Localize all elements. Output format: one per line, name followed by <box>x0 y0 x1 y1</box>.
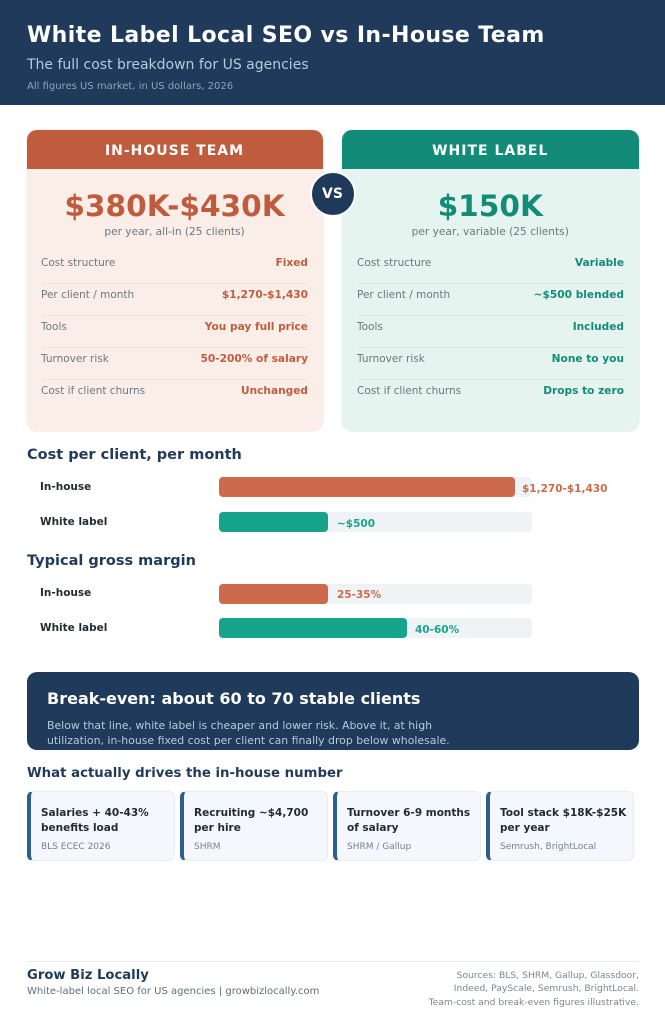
in-house rows: Cost if client churns <box>41 385 145 397</box>
in-house rows: $1,270-$1,430 <box>222 289 308 301</box>
panel: white label <box>342 130 638 431</box>
footer <box>27 961 639 1012</box>
card: recruiting: Recruiting ~$4,700 <box>194 807 308 819</box>
bar chart: gross margin: 25-35% <box>337 589 381 601</box>
sources: Indeed, PayScale, Semrush, BrightLocal. <box>454 983 639 994</box>
title: White Label Local SEO vs In-House Team <box>27 23 545 48</box>
sources: Sources: BLS, SHRM, Gallup, Glassdoor, <box>457 970 639 981</box>
in-house header: IN-HOUSE TEAM <box>105 143 244 159</box>
in-house price: $380K-$430K <box>64 189 285 223</box>
heading: cost per client: Cost per client, per month <box>27 447 242 463</box>
bar chart: gross margin: In-house <box>40 587 91 599</box>
card: tool stack: Tool stack $18K-$25K <box>500 807 626 819</box>
card: salaries: benefits load <box>41 822 118 834</box>
card: recruiting: SHRM <box>194 842 220 852</box>
heading: drivers: What actually drives the in-house number <box>27 766 343 780</box>
bar chart: gross margin <box>40 584 532 638</box>
card: turnover <box>333 791 481 861</box>
white label rows: ~$500 blended <box>534 289 624 301</box>
card: salaries: BLS ECEC 2026 <box>41 842 110 852</box>
in-house rows: You pay full price <box>205 321 308 333</box>
in-house price note: per year, all-in (25 clients) <box>104 226 245 238</box>
card: tool stack: Semrush, BrightLocal <box>500 842 596 852</box>
card: tool stack <box>486 791 634 861</box>
in-house rows: 50-200% of salary <box>200 353 308 365</box>
vs badge <box>310 171 356 217</box>
brand tagline: White-label local SEO for US agencies | growbizlocally.com <box>27 986 319 997</box>
card: turnover: Turnover 6-9 months <box>347 807 470 819</box>
white label rows: Tools <box>357 321 383 333</box>
bar chart: cost per client <box>40 477 607 532</box>
white label rows: Drops to zero <box>543 385 624 397</box>
bar chart: cost per client: $1,270-$1,430 <box>522 483 607 495</box>
in-house rows: Cost structure <box>41 257 115 269</box>
white label rows: Per client / month <box>357 289 450 301</box>
callout: break-even: Below that line, white label is cheaper and lower risk. Above it, at high <box>47 718 432 732</box>
callout: break-even <box>27 672 638 750</box>
card: turnover: SHRM / Gallup <box>347 842 411 852</box>
note: All figures US market, in US dollars, 2026 <box>27 81 233 92</box>
card: tool stack: per year <box>500 822 550 834</box>
bar chart: cost per client: White label <box>40 516 107 528</box>
in-house rows: Unchanged <box>241 385 308 397</box>
card: salaries <box>27 791 175 861</box>
callout: break-even: Break-even: about 60 to 70 stable clients <box>47 689 420 708</box>
white label header <box>342 130 638 169</box>
white label rows: Cost structure <box>357 257 431 269</box>
white label rows: Turnover risk <box>357 353 425 365</box>
in-house rows: Per client / month <box>41 289 134 301</box>
card: turnover: of salary <box>347 822 398 834</box>
white label price: $150K <box>438 189 543 223</box>
card: recruiting: per hire <box>194 822 241 834</box>
header banner <box>0 0 665 105</box>
in-house rows: Fixed <box>276 257 308 269</box>
in-house rows: Turnover risk <box>41 353 109 365</box>
card: salaries: Salaries + 40-43% <box>41 807 149 819</box>
white label rows: None to you <box>552 353 624 365</box>
in-house rows <box>40 257 308 397</box>
bar chart: gross margin: White label <box>40 622 107 634</box>
brand name: Grow Biz Locally <box>27 968 149 982</box>
card: recruiting <box>180 791 328 861</box>
white label rows: Variable <box>575 257 624 269</box>
panel: in-house team <box>26 130 322 431</box>
in-house header <box>26 130 322 169</box>
white label rows <box>356 257 624 397</box>
bar chart: cost per client: ~$500 <box>337 518 375 530</box>
callout: break-even: utilization, in-house fixed cost per client can finally drop below wholesale. <box>47 734 450 746</box>
white label price note: per year, variable (25 clients) <box>412 226 569 238</box>
white label header: WHITE LABEL <box>432 143 548 159</box>
heading: gross margin: Typical gross margin <box>27 553 196 569</box>
bar chart: cost per client: In-house <box>40 481 91 493</box>
white label rows: Cost if client churns <box>357 385 461 397</box>
in-house rows: Tools <box>41 321 67 333</box>
sources <box>428 970 639 1008</box>
vs badge: VS <box>322 186 343 202</box>
white label rows: Included <box>573 321 624 333</box>
sources: Team-cost and break-even figures illustrative. <box>429 997 639 1008</box>
subtitle: The full cost breakdown for US agencies <box>27 57 309 73</box>
bar chart: gross margin: 40-60% <box>415 624 459 636</box>
